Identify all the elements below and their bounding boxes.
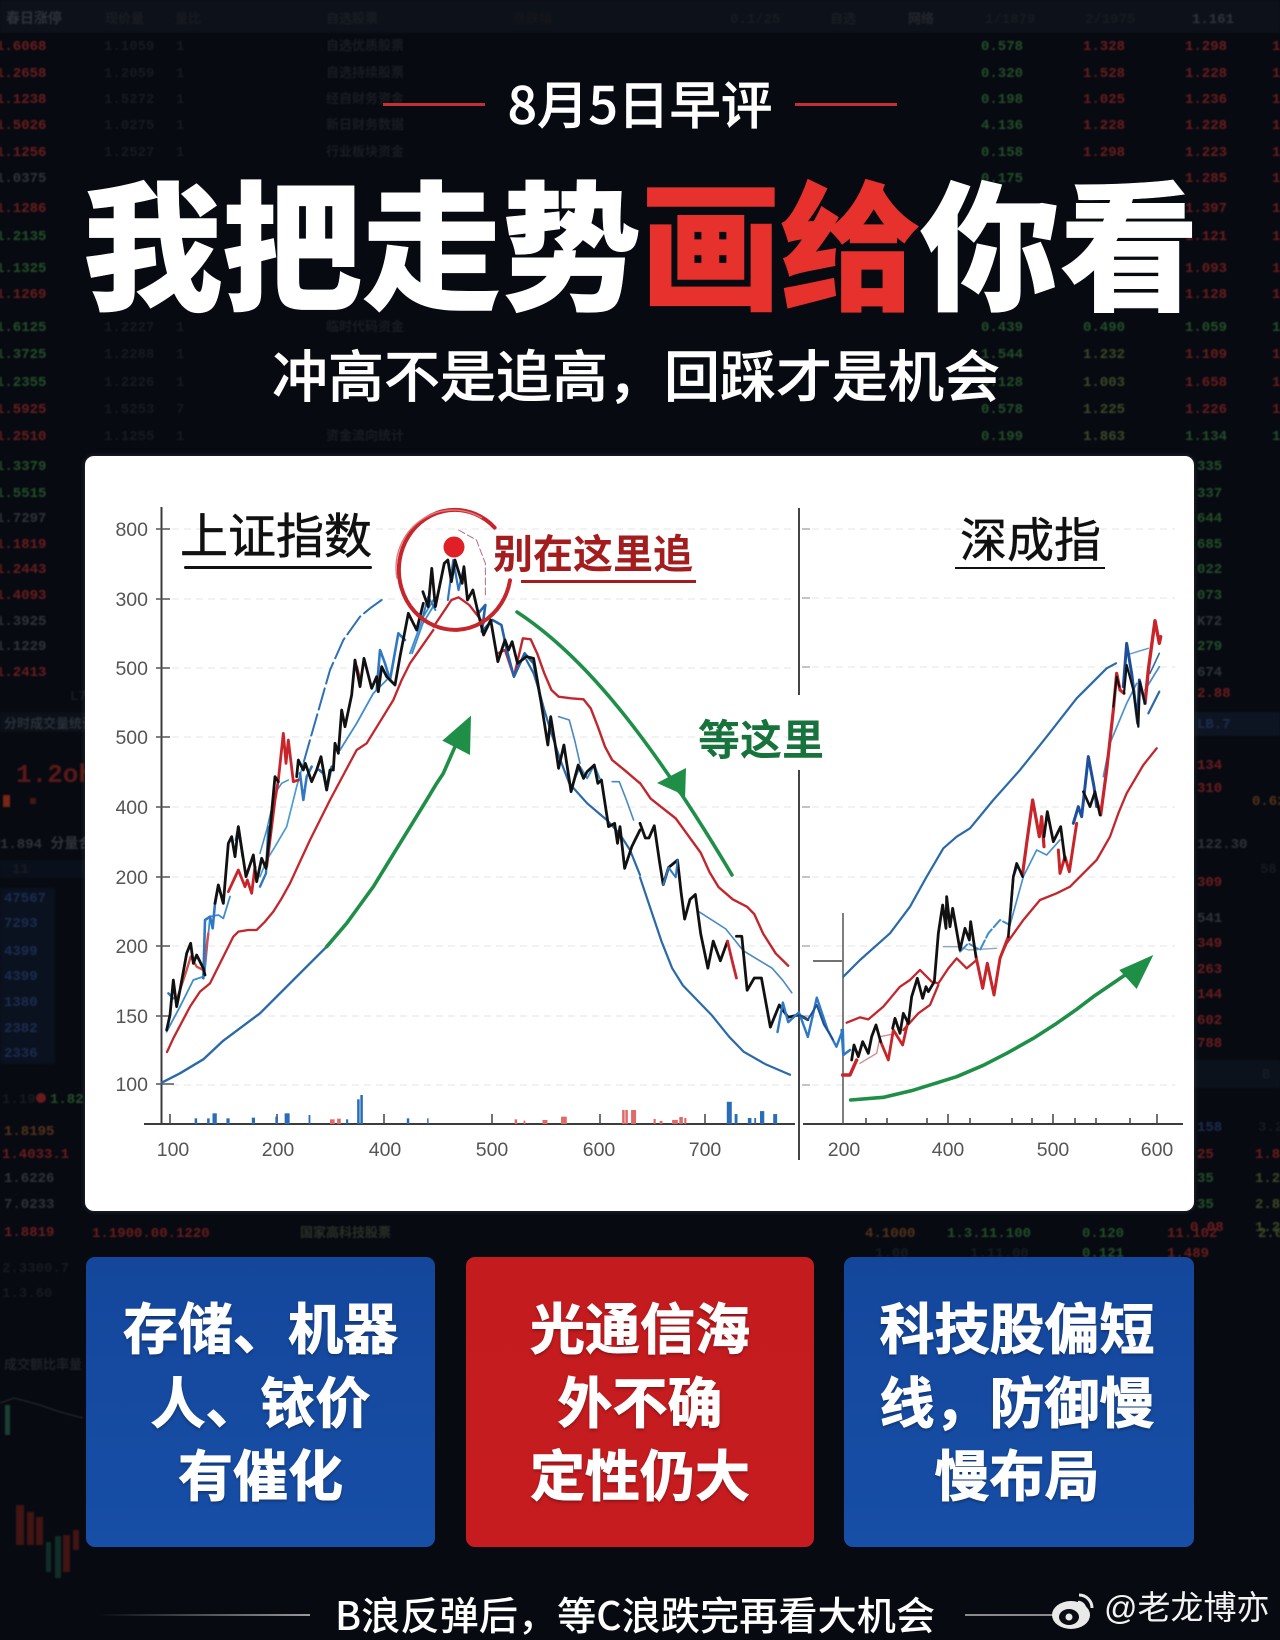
background: faint market data table: 1.228 <box>1083 118 1125 134</box>
rising section lines left <box>162 600 471 1083</box>
background: faint market data table: 1.11.00 <box>970 1246 1029 1262</box>
background: faint market data table: 122.30 <box>1197 837 1247 853</box>
lower blue envelope falling <box>526 660 640 875</box>
background: faint market data table: 1.298 <box>1185 39 1227 55</box>
background: faint market data table: 1.397 <box>1185 201 1227 217</box>
y axis: 200 <box>115 867 148 889</box>
background: faint market data table: 073 <box>1197 588 1222 604</box>
background: faint market data table: 1.3.11.100 <box>947 1226 1031 1242</box>
watermark: weibo icon <box>1052 1594 1094 1629</box>
background: faint market data table: 4.1000 <box>865 1226 915 1242</box>
dashed blue moving average <box>303 600 382 763</box>
background: faint market data table: 47567 <box>4 891 46 907</box>
background: faint market data table: 临时代码资金 <box>326 319 404 335</box>
background: faint market data table: 1 <box>176 347 184 363</box>
blue price overlays peak <box>448 560 464 600</box>
background: faint market data table: 35 <box>1197 1197 1214 1213</box>
background: faint market data table: 11.102 <box>1167 1226 1217 1242</box>
blue envelope into green rise arrow <box>162 947 327 1083</box>
panel: blue card left <box>86 1257 435 1547</box>
background: faint market data table: 1 <box>176 375 184 391</box>
background: faint market data table: 1.2226 <box>104 375 154 391</box>
background: faint market data table: 春日涨停 <box>6 10 62 28</box>
background: faint market data table: 309 <box>1197 875 1222 891</box>
background: faint market data table: 674 <box>1197 665 1222 681</box>
background: faint market data table: 0.439 <box>981 320 1023 336</box>
background: faint market data table: 1.0275 <box>104 118 154 134</box>
subtitle: 冲高不是追高，回踩才是机会 <box>272 333 1000 414</box>
label: wait here: 等这里 <box>698 707 824 768</box>
underline: Shanghai index <box>184 566 372 568</box>
background: faint market data table: 1.5272 <box>104 92 154 108</box>
background: faint market data table: 335 <box>1197 459 1222 475</box>
background: faint market data table: 58 <box>1260 862 1277 878</box>
background: faint market data table: 602 <box>1197 1013 1222 1029</box>
background: faint market data table: 2.88 <box>1197 686 1231 702</box>
background: faint market data table: 0.120 <box>1082 1226 1124 1242</box>
background: faint market data table: 35 <box>1197 1171 1214 1187</box>
background: faint market data table: 0.1/25 <box>730 12 780 28</box>
background: faint market data table: 网络 <box>908 11 934 27</box>
background: faint market data table: 1.226 <box>1185 402 1227 418</box>
background: faint market data table: 分时成交量统计 <box>4 716 95 732</box>
background: faint market data table: 1.1059 <box>104 39 154 55</box>
background: faint market data table: 1380 <box>4 995 38 1011</box>
background: faint market data table: 4399 <box>4 944 38 960</box>
background: faint market data table: 1.228 <box>1185 118 1227 134</box>
date heading <box>383 64 897 139</box>
background: faint market data table: 1.8195 <box>4 1124 54 1140</box>
background: faint market data table: 1 <box>176 66 184 82</box>
background: faint market data table: 1.225 <box>1083 402 1125 418</box>
volume bars right <box>727 1102 777 1124</box>
background: faint market data table: 行业板块资金 <box>326 144 404 160</box>
background: faint market data table: 263 <box>1197 962 1222 978</box>
background: faint market data table: 1.228 <box>1185 66 1227 82</box>
red price right <box>843 1060 857 1075</box>
y axis: 150 <box>115 1006 148 1028</box>
background: faint market data table: 1 <box>176 320 184 336</box>
chart: index trend lines <box>115 507 1183 1161</box>
lower blue envelope <box>640 877 790 1075</box>
background: faint market data table: 1.8819 <box>4 1225 54 1241</box>
date rule left <box>383 103 485 106</box>
x axis: 500 <box>1037 1139 1069 1161</box>
background: faint market data table: 1.232 <box>1083 347 1125 363</box>
background: faint market data table: 4399 <box>4 969 38 985</box>
x axis: 400 <box>932 1139 964 1161</box>
background: faint market data table: 7 <box>176 402 184 418</box>
label: Shenzhen index: 深成指 <box>960 502 1101 571</box>
background: faint market data table: K72 <box>1197 614 1222 630</box>
black price line falling continued <box>640 823 727 968</box>
panel: red card middle: 光通信海 <box>530 1285 750 1365</box>
panel: blue card right: 慢布局 <box>934 1432 1100 1512</box>
background: faint market data table: 1.128 <box>1185 287 1227 303</box>
background: faint market data table: 144 <box>1197 987 1222 1003</box>
background: faint market data table: 国家高科技股票 <box>300 1225 391 1241</box>
underline: Shenzhen index <box>955 567 1105 569</box>
background: faint market data table: 7.0233 <box>4 1197 54 1213</box>
red price overlays rising <box>177 933 208 1000</box>
volume bars left <box>195 1095 636 1124</box>
y axis: 200 <box>115 936 148 958</box>
panel: blue card left: 有催化 <box>178 1432 343 1512</box>
underline: dont chase <box>521 580 696 582</box>
background: faint market data table: 1.109 <box>1185 347 1227 363</box>
black price right <box>852 1025 881 1060</box>
background: faint market data table: 349 <box>1197 936 1222 952</box>
x axis: 700 <box>689 1139 721 1161</box>
background: faint market data table: 资金流向统计 <box>326 428 404 444</box>
background: faint market data table: 1.1255 <box>104 429 154 445</box>
date text: 8月5日早评 <box>508 64 772 139</box>
x axis: 500 <box>476 1139 508 1161</box>
background: faint market data table: 0.175 <box>981 171 1023 187</box>
background: faint market data table: 0.199 <box>981 429 1023 445</box>
black price line rising <box>167 943 205 1030</box>
blue price right <box>1073 757 1097 823</box>
background: faint market data table: 0.158 <box>981 145 1023 161</box>
peak and falling lines left <box>412 530 640 875</box>
green down arrow <box>517 612 732 875</box>
background: faint market data table: 1 <box>176 429 184 445</box>
label: Shanghai index: 上证指数 <box>180 497 372 567</box>
footer line right <box>965 1614 1065 1616</box>
background: faint market data table: 0.578 <box>981 39 1023 55</box>
background: faint market data table: 1.121 <box>1185 229 1227 245</box>
thin blue right <box>860 1033 897 1063</box>
background: faint market data table: 1.6226 <box>4 1171 54 1187</box>
x axis: 200 <box>828 1139 860 1161</box>
background: faint market data table: 2382 <box>4 1021 38 1037</box>
background: faint market data table: 1.025 <box>1083 92 1125 108</box>
upper blue envelope <box>843 663 1116 977</box>
background: faint market data table: 11 <box>12 862 29 878</box>
x axis: 600 <box>1141 1139 1173 1161</box>
background: faint market data table: 1.003 <box>1083 375 1125 391</box>
background: faint market data table: 1.544 <box>981 347 1023 363</box>
background: faint market data table: 541 <box>1197 911 1222 927</box>
background: faint market data table: 4.136 <box>981 118 1023 134</box>
background: faint market data table: 1.285 <box>1185 171 1227 187</box>
watermark: handle: @老龙博亦 <box>1104 1589 1270 1626</box>
background: faint market data table: 0.128 <box>981 375 1023 391</box>
background: faint market data table: 134 <box>1197 758 1222 774</box>
background: faint market data table: 1.328 <box>1083 39 1125 55</box>
background: faint market data table: 1.489 <box>1167 1246 1209 1262</box>
panel: blue card left: 人、铱价 <box>150 1358 370 1438</box>
background: faint market data table: 158 <box>1197 1120 1222 1136</box>
panel: red card middle: 定性仍大 <box>530 1432 750 1512</box>
rising section lines right <box>842 621 1161 1100</box>
background: faint market data table: 7293 <box>4 916 38 932</box>
background: faint market data table: 1.236 <box>1185 92 1227 108</box>
x axis: 100 <box>157 1139 189 1161</box>
x axis: 400 <box>369 1139 401 1161</box>
red moving average rising <box>167 630 433 1052</box>
y axis: 100 <box>115 1074 148 1096</box>
background: faint market data table: 量比 <box>175 12 201 27</box>
background: faint market data table: 经自财务资金 <box>326 91 404 107</box>
background: faint market data table: 新日财务数据 <box>326 117 404 133</box>
divider <box>798 508 800 1160</box>
background: faint market data table: 1.528 <box>1083 66 1125 82</box>
panel: blue card right <box>844 1257 1194 1547</box>
background: faint market data table: 1/1879 <box>985 12 1035 28</box>
y axis: 500 <box>115 658 148 680</box>
background: faint market data table: 1.2059 <box>104 66 154 82</box>
red moving average continuation <box>640 783 788 966</box>
background: faint market data table: 1.093 <box>1185 261 1227 277</box>
background: faint market data table: 1.2227 <box>104 320 154 336</box>
y axis: 400 <box>115 797 148 819</box>
background: faint market data table: 2336 <box>4 1046 38 1062</box>
background: faint market data table: 0.320 <box>981 66 1023 82</box>
panel: red card middle <box>466 1257 814 1547</box>
background: faint market data table: 1.4033.1 <box>2 1147 69 1163</box>
panel: red card middle: 外不确 <box>557 1358 722 1438</box>
background: faint market data table: 0.578 <box>981 402 1023 418</box>
background: faint market data table: 1 <box>176 92 184 108</box>
background: faint market data table: 1.223 <box>1185 145 1227 161</box>
background: faint market data table: 自选优质股票 <box>326 38 404 54</box>
thin blue moving averages peak <box>412 600 437 653</box>
background: faint market data table: 685 <box>1197 537 1222 553</box>
panel: blue card right: 线，防御慢 <box>879 1358 1154 1438</box>
background: faint market data table: 自选持续股票 <box>326 65 404 81</box>
background: faint market data table: 1.298 <box>1083 145 1125 161</box>
background: faint market data table: 1.19 <box>2 1092 36 1108</box>
black price line falling <box>423 560 640 868</box>
background: faint market data table: 1.1900.00.1220 <box>92 1226 210 1242</box>
background: faint market data table: 1.00 <box>875 1246 909 1262</box>
background: faint market data table: 自选股票 <box>326 11 378 27</box>
background: faint market data table: 1.2288 <box>104 347 154 363</box>
background: faint market data table: 310 <box>1197 781 1222 797</box>
background: faint market data table: B <box>1262 1067 1271 1083</box>
background: faint market data table: 279 <box>1197 639 1222 655</box>
background: faint market data table: 1.894 分量合计 <box>0 835 106 853</box>
background: faint market data table: 1.134 <box>1185 429 1227 445</box>
y axis: 800 <box>115 519 148 541</box>
background: faint market data table: 788 <box>1197 1036 1222 1052</box>
background: faint market data table: 0.121 <box>1082 1246 1124 1262</box>
background: faint market data table: 现价量 <box>105 12 144 27</box>
background: faint market data table: 1.5253 <box>104 402 154 418</box>
background: faint market data table: 1 <box>176 145 184 161</box>
background: faint market data table: L78 <box>70 689 95 705</box>
background: faint market data table: 0.08 <box>1190 1220 1224 1236</box>
background: faint market data table: 涨跌幅 <box>513 11 552 27</box>
background: faint market data table: 1.2ohltii <box>16 760 156 790</box>
background: faint market data table: 337 <box>1197 486 1222 502</box>
background: faint market data table: 1.2527 <box>104 145 154 161</box>
background: faint market data table: 25 <box>1197 1147 1214 1163</box>
red moving average right <box>847 958 977 1023</box>
panel: chart card <box>85 456 1194 1211</box>
y axis: 500 <box>115 727 148 749</box>
background: faint market data table: LB.7 <box>1197 717 1231 733</box>
background: faint market data table: 2/1975 <box>1085 12 1135 28</box>
footer line left <box>98 1614 310 1616</box>
main title: 我把走势画给你看 <box>83 138 1199 340</box>
panel: blue card right: 科技股偏短 <box>879 1285 1154 1365</box>
background: faint market data table: 1.059 <box>1185 320 1227 336</box>
background: faint market data table: 1 <box>176 39 184 55</box>
red moving average peak <box>434 597 484 627</box>
x axis: 600 <box>583 1139 615 1161</box>
label: dont chase here: 别在这里追 <box>493 522 693 580</box>
date rule right <box>795 103 897 106</box>
x axis: 200 <box>262 1139 294 1161</box>
x axis <box>157 1114 1173 1161</box>
green rise arrow right <box>851 972 1130 1100</box>
background: faint market data table: 0.490 <box>1083 320 1125 336</box>
red warning circle with dot <box>396 510 510 630</box>
background: faint market data table: 1 <box>176 118 184 134</box>
y axis: 300 <box>115 589 148 611</box>
background: faint market data table: 1.658 <box>1185 375 1227 391</box>
background: faint market data table: 1.3.60 <box>2 1286 52 1302</box>
background: faint market data table: 1.82 <box>50 1092 84 1108</box>
background: faint market data table: 0.198 <box>981 92 1023 108</box>
background: faint market data table: 成交额比率量 <box>4 1357 82 1373</box>
background: faint market data table: 644 <box>1197 511 1222 527</box>
background: faint market data table: 自选 <box>830 11 856 27</box>
background: faint market data table: 022 <box>1197 562 1222 578</box>
background: faint market data table: 2.3300.7 <box>2 1261 69 1277</box>
background: faint market data table: 1.161 <box>1192 12 1234 28</box>
falling and base lines, right of mid <box>640 783 844 1124</box>
background: faint market data table: 1.863 <box>1083 429 1125 445</box>
blue price overlays rising <box>168 993 173 998</box>
y axis <box>115 507 1183 1124</box>
panel: blue card left: 存储、机器 <box>123 1285 398 1365</box>
